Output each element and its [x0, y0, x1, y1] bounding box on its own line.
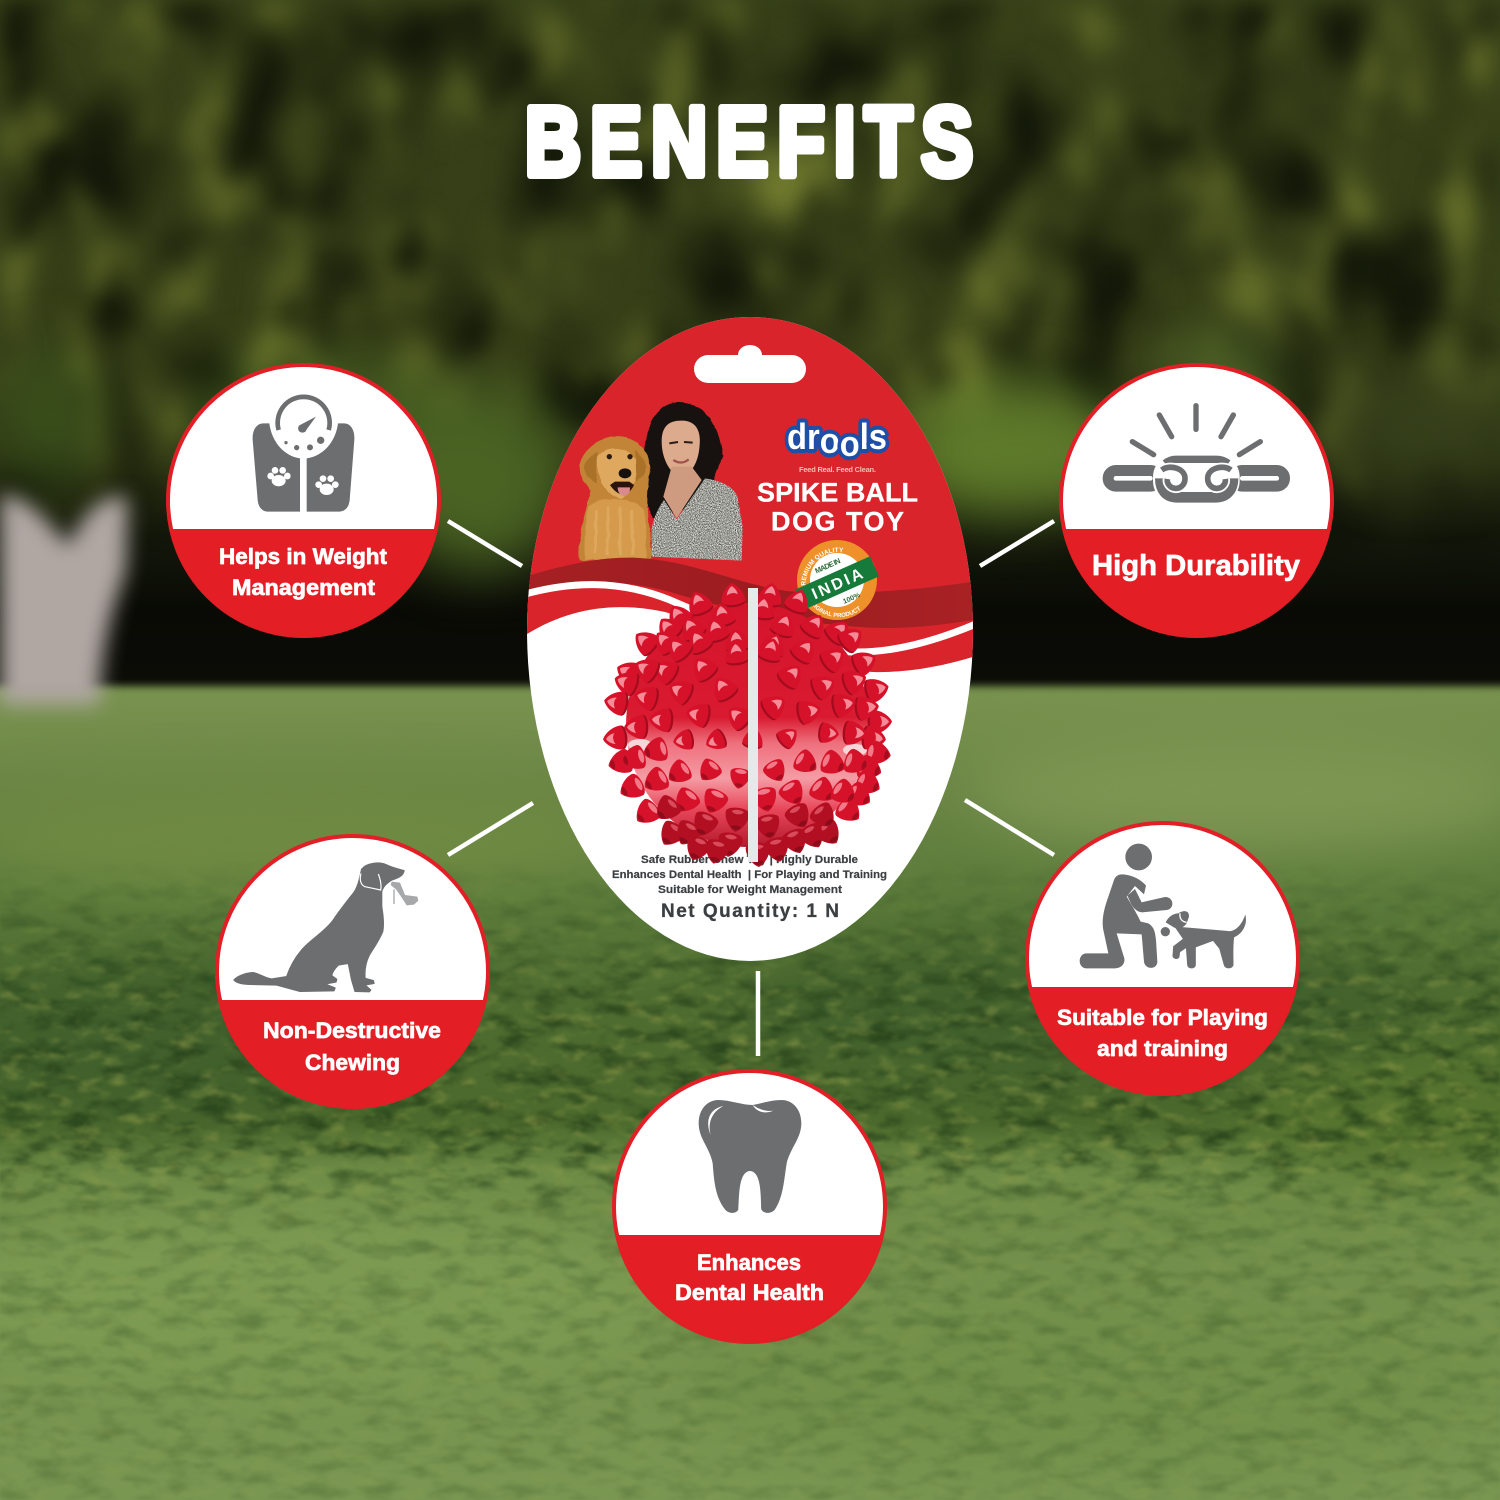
label: Suitable for Playing: [1057, 1005, 1268, 1030]
white wave stripe: [515, 585, 985, 652]
connector lines: [448, 521, 1054, 1056]
badge: non-destructive chewing: [217, 836, 488, 1107]
net quantity: Net Quantity: 1 N: [661, 901, 839, 922]
woman photo: [643, 402, 743, 561]
icon: tooth: [699, 1100, 801, 1213]
label: [219, 544, 388, 600]
drools logo: drools: [787, 416, 887, 464]
claim lines: Safe Rubber Chew Toy | Highly Durable: [641, 854, 858, 866]
label: Dental Health: [675, 1280, 824, 1305]
golden retriever photo: [579, 437, 651, 561]
hang hole: [694, 345, 806, 383]
label: Chewing: [305, 1050, 400, 1075]
label: and training: [1097, 1036, 1228, 1061]
label: [675, 1250, 824, 1305]
label: High Durability: [1092, 550, 1300, 582]
made in india badge: 100%: [842, 592, 862, 606]
dark red wave: [515, 558, 985, 628]
label: [263, 1018, 441, 1075]
claim lines: Suitable for Weight Management: [658, 884, 842, 896]
icon: sitting dog with shoe: [234, 863, 418, 992]
label: Enhances: [697, 1250, 801, 1275]
made in india badge: PREMIUM QUALITY: [801, 548, 844, 587]
label: [1057, 1005, 1268, 1061]
product name: DOG TOY: [771, 506, 904, 536]
badge: durability: [1061, 365, 1332, 636]
made in india badge: MADE IN: [814, 556, 842, 575]
icon: person training dog: [1080, 844, 1245, 968]
icon: chain: [1108, 406, 1284, 497]
tagline: Feed Real. Feed Clean.: [799, 465, 876, 474]
title: BENEFITS: [525, 87, 973, 196]
card red header: [515, 300, 985, 672]
label: Non-Destructive: [263, 1018, 441, 1043]
badge: weight management: [168, 365, 439, 636]
icon: pet weighing scale: [253, 397, 354, 512]
product name: [757, 478, 918, 536]
badge: dental health: [614, 1071, 885, 1342]
claim lines: Enhances Dental Health | For Playing and Training: [612, 869, 887, 881]
made in india badge: INDIA: [809, 565, 866, 603]
made in india badge: ORIGINAL PRODUCT: [812, 604, 860, 618]
product card: [527, 317, 973, 961]
product name: SPIKE BALL: [757, 478, 918, 508]
claim lines: [612, 854, 887, 896]
label: Helps in Weight: [219, 544, 388, 569]
card slot strip: [748, 588, 758, 862]
spike ball: [602, 581, 893, 868]
label: Management: [232, 575, 376, 600]
badge: playing and training: [1027, 823, 1298, 1094]
made in india badge: [795, 540, 879, 620]
